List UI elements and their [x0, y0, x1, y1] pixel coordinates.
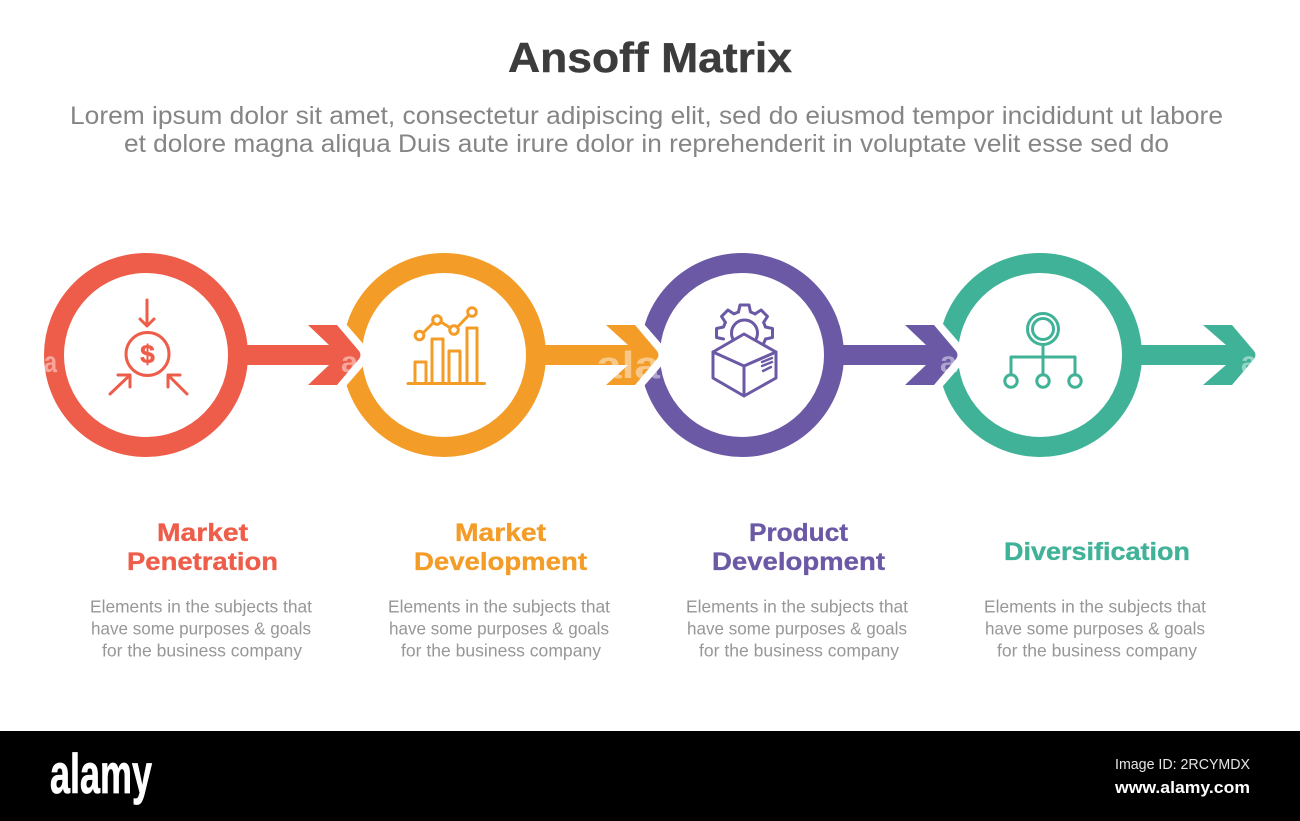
icon: dollar with converging arrows: $	[140, 339, 155, 369]
description: market development: Elements in the subjects that	[388, 596, 610, 616]
arrow: step 1	[236, 325, 363, 385]
arrow: step 2	[534, 325, 661, 385]
icon: gear and box	[713, 305, 776, 396]
description: diversification: for the business company	[997, 640, 1197, 660]
ring: step 3	[650, 263, 834, 447]
label: market development	[388, 519, 610, 660]
intro text block	[70, 102, 1223, 158]
heading: diversification: Diversification	[1004, 538, 1190, 566]
watermark fragments: a	[44, 346, 57, 379]
arrow: step 3	[832, 325, 960, 385]
description: market development	[388, 596, 610, 660]
watermark fragments: a	[1241, 346, 1257, 379]
description: product development: have some purposes & goals	[687, 618, 907, 638]
icon: dollar with converging arrows	[110, 300, 187, 394]
panel: step 1 market penetration	[54, 263, 363, 447]
panel: step 3 product development	[650, 263, 960, 447]
icon: bar chart with trend line	[408, 308, 484, 384]
description: product development	[686, 596, 908, 660]
watermark fragments: a	[341, 346, 358, 379]
heading: product development	[712, 519, 886, 576]
heading: product development: Development	[712, 548, 886, 576]
description: diversification: Elements in the subjects that	[984, 596, 1206, 616]
footer bar	[0, 731, 1300, 821]
panel: step 2 market development	[352, 263, 661, 447]
watermark fragments	[44, 345, 1257, 387]
description: diversification: have some purposes & goals	[985, 618, 1205, 638]
heading: product development: Product	[749, 519, 849, 547]
watermark fragments: ala	[596, 345, 661, 387]
label: diversification	[984, 538, 1206, 660]
heading: market penetration: Market	[157, 519, 249, 547]
title: Ansoff Matrix	[508, 34, 793, 81]
heading: market development	[414, 519, 588, 576]
icon: network hierarchy	[1005, 314, 1081, 387]
image id: Image ID: 2RCYMDX	[1115, 756, 1250, 773]
panel: step 4 diversification	[948, 263, 1256, 447]
ring: step 1	[54, 263, 238, 447]
description: market penetration: Elements in the subjects that	[90, 596, 312, 616]
heading: market penetration: Penetration	[127, 548, 278, 576]
description: market development: have some purposes & goals	[389, 618, 609, 638]
label: market penetration	[90, 519, 312, 660]
heading: market development: Development	[414, 548, 588, 576]
intro text block: et dolore magna aliqua Duis aute irure dolor in reprehenderit in voluptate velit esse sed do	[124, 130, 1169, 158]
ring: step 4	[948, 263, 1132, 447]
description: product development: for the business company	[699, 640, 899, 660]
watermark fragments: a	[940, 346, 957, 379]
heading: market penetration	[127, 519, 278, 576]
description: market penetration: have some purposes & goals	[91, 618, 311, 638]
description: market development: for the business company	[401, 640, 601, 660]
ring: step 2	[352, 263, 536, 447]
description: market penetration	[90, 596, 312, 660]
heading: market development: Market	[455, 519, 547, 547]
arrow: step 4	[1130, 325, 1256, 385]
description: diversification	[984, 596, 1206, 660]
description: market penetration: for the business company	[102, 640, 302, 660]
footer logo: alamy	[50, 742, 152, 805]
label: product development	[686, 519, 908, 660]
website: www.alamy.com	[1114, 778, 1250, 797]
description: product development: Elements in the subjects that	[686, 596, 908, 616]
intro text block: Lorem ipsum dolor sit amet, consectetur adipiscing elit, sed do eiusmod tempor incididunt ut labore	[70, 102, 1223, 130]
